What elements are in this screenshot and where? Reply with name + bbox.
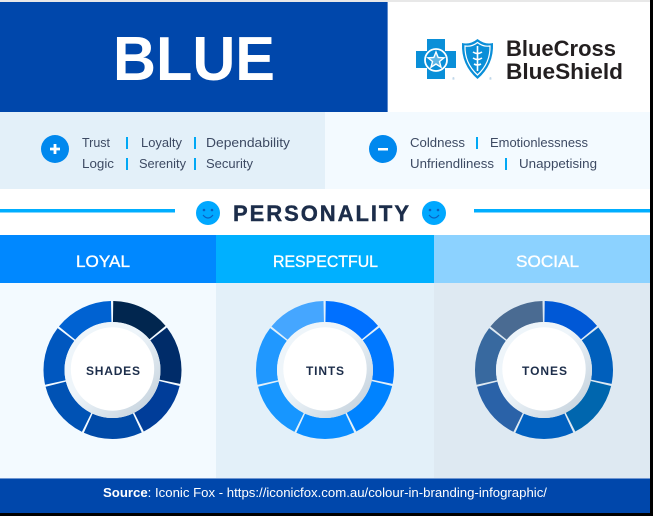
positive trait words: Dependability bbox=[206, 135, 291, 150]
panel: respectful / tints bbox=[216, 235, 434, 478]
title: BLUE: BLUE bbox=[113, 25, 275, 94]
header: logo panel bbox=[388, 2, 650, 112]
icon: plus bbox=[41, 135, 69, 163]
icon: smiley left bbox=[196, 201, 220, 225]
panel: loyal / shades bbox=[0, 235, 216, 478]
label: TINTS: TINTS bbox=[306, 364, 344, 378]
heading: RESPECTFUL: RESPECTFUL bbox=[273, 252, 378, 271]
icon: smiley right bbox=[422, 201, 446, 225]
positive trait words: Loyalty bbox=[141, 135, 182, 150]
negative trait words: Emotionlessness bbox=[490, 135, 588, 150]
logo wordmark: BlueCross bbox=[506, 36, 616, 61]
donut: tints bbox=[243, 288, 407, 452]
heading: SOCIAL: SOCIAL bbox=[516, 252, 579, 271]
positive trait words bbox=[82, 135, 291, 171]
negative trait words bbox=[410, 135, 597, 171]
logo wordmark: BlueShield bbox=[506, 59, 623, 84]
negative trait words: Coldness bbox=[410, 135, 466, 150]
positive trait words: Security bbox=[206, 156, 253, 171]
heading: PERSONALITY: PERSONALITY bbox=[233, 201, 409, 226]
icon: Blue Cross logo bbox=[416, 39, 456, 81]
panel: positive traits bbox=[0, 112, 325, 189]
label: TONES: TONES bbox=[522, 364, 567, 378]
positive trait words: Serenity bbox=[139, 156, 186, 171]
icon: Blue Shield logo: ® bbox=[489, 76, 492, 81]
donut: shades bbox=[30, 288, 195, 452]
icon: minus bbox=[369, 135, 397, 163]
positive trait words: Logic bbox=[82, 156, 115, 171]
icon: Blue Cross logo: ® bbox=[452, 76, 455, 81]
positive trait words: Trust bbox=[82, 135, 110, 150]
negative trait words: Unappetising bbox=[519, 156, 597, 171]
panel: social / tones bbox=[434, 235, 650, 478]
logo wordmark bbox=[506, 36, 623, 84]
heading: LOYAL: LOYAL bbox=[76, 252, 130, 271]
footer: source: Source: Iconic Fox - https://iconicfox.com.au/colour-in-branding-infographic/ bbox=[103, 486, 548, 500]
personality heading band bbox=[0, 189, 650, 235]
header: blue title panel bbox=[0, 2, 388, 112]
footer: source bbox=[0, 478, 650, 513]
icon: Blue Shield logo bbox=[462, 39, 493, 81]
negative trait words: Unfriendliness bbox=[410, 156, 495, 171]
donut: tones bbox=[462, 288, 626, 452]
panel: negative traits bbox=[325, 112, 650, 189]
label: SHADES: SHADES bbox=[86, 364, 140, 378]
